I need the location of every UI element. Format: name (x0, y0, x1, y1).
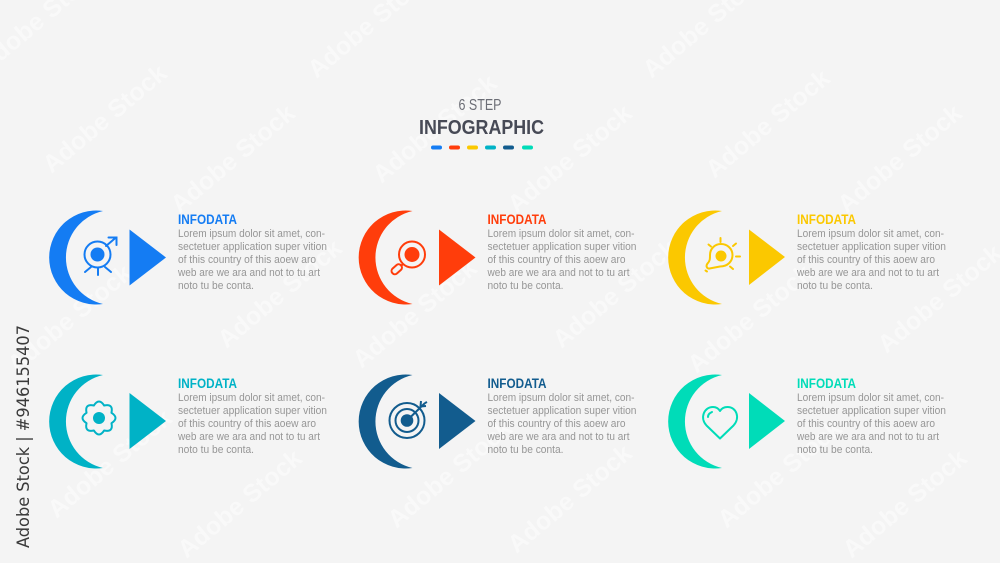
subtitle: 6 STEP: 6 STEP (458, 97, 502, 114)
heading: INFOGRAPHIC: INFOGRAPHIC (419, 117, 544, 139)
body text (177, 392, 327, 456)
watermark pattern: Adobe Stock (165, 99, 300, 219)
body text: web are we ara and not to tu art (796, 267, 939, 279)
body text: of this country of this aoew aro (488, 418, 626, 430)
watermark pattern: Adobe Stock (212, 234, 347, 354)
body text: Lorem ipsum dolor sit amet, con- (178, 392, 325, 404)
body text: web are we ara and not to tu art (177, 431, 320, 443)
crescent (49, 374, 103, 468)
watermark pattern: Adobe Stock (682, 259, 817, 379)
arrow (749, 230, 785, 285)
body text (796, 228, 946, 292)
watermark pattern: Adobe Stock (347, 254, 482, 374)
watermark pattern: Adobe Stock (837, 444, 972, 563)
crescent (49, 210, 103, 305)
body text: sectetuer application super vition (488, 405, 637, 417)
body text: noto tu be conta. (797, 280, 873, 292)
body text: noto tu be conta. (797, 444, 873, 456)
heading: INFODATA (178, 376, 237, 391)
icon: heart (703, 407, 737, 438)
watermark pattern: Adobe Stock (382, 414, 517, 534)
watermark pattern: Adobe Stock (172, 444, 307, 563)
body text: web are we ara and not to tu art (487, 431, 630, 443)
crescent (359, 374, 412, 468)
arrow (130, 393, 166, 449)
body text: of this country of this aoew aro (797, 418, 935, 430)
heading: INFODATA (488, 376, 547, 391)
crescent (668, 374, 722, 468)
title block (419, 97, 544, 150)
body text: web are we ara and not to tu art (487, 267, 630, 279)
watermark pattern: Adobe Stock (2, 259, 137, 379)
panel: step 2 red (359, 210, 637, 304)
body text: sectetuer application super vition (797, 405, 946, 417)
icon: magnifier (390, 242, 425, 276)
panel: step 1 blue (49, 210, 327, 305)
body text: sectetuer application super vition (797, 241, 946, 253)
heading: INFODATA (178, 212, 237, 227)
watermark pattern: Adobe Stock (502, 439, 637, 559)
body text (796, 392, 946, 456)
body text: Lorem ipsum dolor sit amet, con- (178, 228, 325, 240)
body text: Lorem ipsum dolor sit amet, con- (488, 228, 635, 240)
body text (177, 228, 327, 292)
watermark pattern: Adobe Stock (502, 99, 637, 219)
body text: sectetuer application super vition (488, 241, 637, 253)
crescent (668, 210, 722, 304)
body text: sectetuer application super vition (178, 405, 327, 417)
panel: step 5 navy (359, 374, 637, 468)
body text: of this country of this aoew aro (178, 418, 316, 430)
crescent (359, 210, 412, 304)
arrow (439, 230, 476, 286)
body text: noto tu be conta. (488, 280, 564, 292)
icon: gear (83, 402, 115, 434)
watermark pattern: Adobe Stock (547, 234, 682, 354)
icon: light bulb (706, 238, 740, 272)
heading: INFODATA (488, 212, 547, 227)
panel: step 3 yellow (668, 210, 946, 304)
colour dashes (431, 146, 533, 150)
arrow (130, 230, 166, 286)
watermark pattern: Adobe Stock (367, 69, 502, 189)
icon: bullseye with arrow (390, 401, 427, 438)
body text: noto tu be conta. (488, 444, 564, 456)
body text: web are we ara and not to tu art (796, 431, 939, 443)
body text: of this country of this aoew aro (797, 254, 935, 266)
heading: INFODATA (797, 376, 856, 391)
body text (487, 392, 637, 456)
body text: web are we ara and not to tu art (177, 267, 320, 279)
icon: target with arrow (84, 238, 116, 275)
body text: noto tu be conta. (178, 444, 254, 456)
body text: of this country of this aoew aro (178, 254, 316, 266)
body text: sectetuer application super vition (178, 241, 327, 253)
watermark pattern: Adobe Stock (832, 99, 967, 219)
watermark pattern: Adobe Stock (37, 59, 172, 179)
heading: INFODATA (797, 212, 856, 227)
watermark pattern: Adobe Stock (712, 414, 847, 534)
arrow (439, 393, 476, 449)
body text (487, 228, 637, 292)
watermark pattern: Adobe Stock (700, 64, 835, 184)
body text: noto tu be conta. (178, 280, 254, 292)
body text: Lorem ipsum dolor sit amet, con- (488, 392, 635, 404)
body text: Lorem ipsum dolor sit amet, con- (797, 392, 944, 404)
watermark pattern: Adobe Stock (42, 404, 177, 524)
body text: Lorem ipsum dolor sit amet, con- (797, 228, 944, 240)
panel: step 4 teal (49, 374, 327, 468)
panel: step 6 mint (668, 374, 946, 468)
body text: of this country of this aoew aro (488, 254, 626, 266)
arrow (749, 393, 785, 449)
stock id label: Adobe Stock | #946155407 (14, 325, 34, 548)
